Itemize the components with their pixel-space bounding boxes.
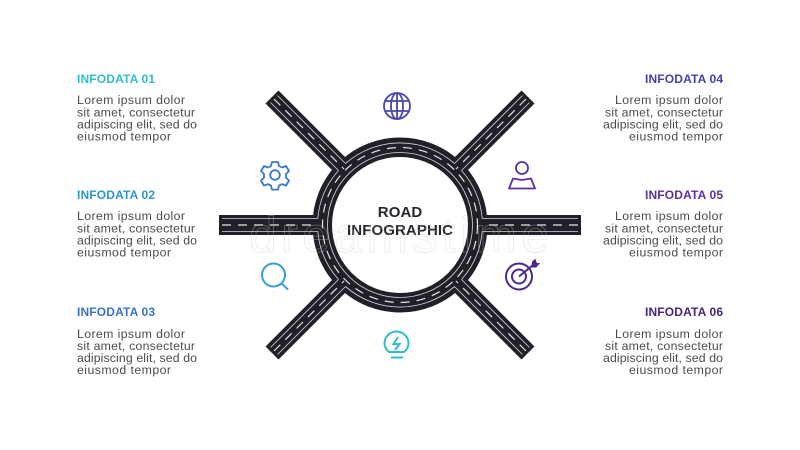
text block: infodata 05: sit amet, consectetur	[605, 222, 723, 236]
text block: infodata 01	[77, 72, 197, 144]
text block: infodata 02: Lorem ipsum dolor	[77, 209, 185, 223]
text block: infodata 03: adipiscing elit, sed do	[77, 351, 197, 365]
text block: infodata 03	[77, 305, 197, 377]
text block: infodata 06	[603, 305, 723, 377]
text block: infodata 02: INFODATA 02	[77, 188, 155, 202]
text block: infodata 03: eiusmod tempor	[77, 363, 171, 377]
text block: infodata 01: Lorem ipsum dolor	[77, 93, 185, 107]
text block: infodata 04: adipiscing elit, sed do	[603, 118, 723, 132]
text block: infodata 05	[603, 188, 723, 260]
text block: infodata 02: eiusmod tempor	[77, 246, 171, 260]
text block: infodata 01: INFODATA 01	[77, 72, 155, 86]
center title	[347, 204, 453, 239]
icon: globe	[384, 93, 410, 119]
text block: infodata 06: adipiscing elit, sed do	[603, 351, 723, 365]
text block: infodata 06: Lorem ipsum dolor	[615, 327, 723, 341]
icon: gear	[261, 162, 289, 190]
text block: infodata 06: eiusmod tempor	[629, 363, 723, 377]
icon: target	[506, 260, 539, 290]
text block: infodata 01: sit amet, consectetur	[77, 106, 195, 120]
icon: person	[509, 162, 535, 188]
center title: ROAD	[378, 204, 422, 221]
text block: infodata 03: INFODATA 03	[77, 305, 155, 319]
text block: infodata 05: Lorem ipsum dolor	[615, 209, 723, 223]
text block: infodata 01: adipiscing elit, sed do	[77, 118, 197, 132]
text block: infodata 04	[603, 72, 723, 144]
text block: infodata 02: adipiscing elit, sed do	[77, 234, 197, 248]
text block: infodata 06: INFODATA 06	[645, 305, 723, 319]
text block: infodata 05: INFODATA 05	[645, 188, 723, 202]
text block: infodata 03: Lorem ipsum dolor	[77, 327, 185, 341]
text block: infodata 05: adipiscing elit, sed do	[603, 234, 723, 248]
center title: INFOGRAPHIC	[347, 222, 453, 239]
text block: infodata 03: sit amet, consectetur	[77, 339, 195, 353]
icon: magnifier	[262, 264, 288, 290]
text block: infodata 04: Lorem ipsum dolor	[615, 93, 723, 107]
text block: infodata 04: sit amet, consectetur	[605, 106, 723, 120]
icon: light bulb	[384, 332, 408, 358]
text block: infodata 04: eiusmod tempor	[629, 130, 723, 144]
text block: infodata 02: sit amet, consectetur	[77, 222, 195, 236]
text block: infodata 05: eiusmod tempor	[629, 246, 723, 260]
text block: infodata 06: sit amet, consectetur	[605, 339, 723, 353]
text block: infodata 04: INFODATA 04	[645, 72, 723, 86]
watermark: dreamstime	[249, 207, 549, 263]
road network	[219, 90, 581, 360]
text block: infodata 01: eiusmod tempor	[77, 130, 171, 144]
text block: infodata 02	[77, 188, 197, 260]
